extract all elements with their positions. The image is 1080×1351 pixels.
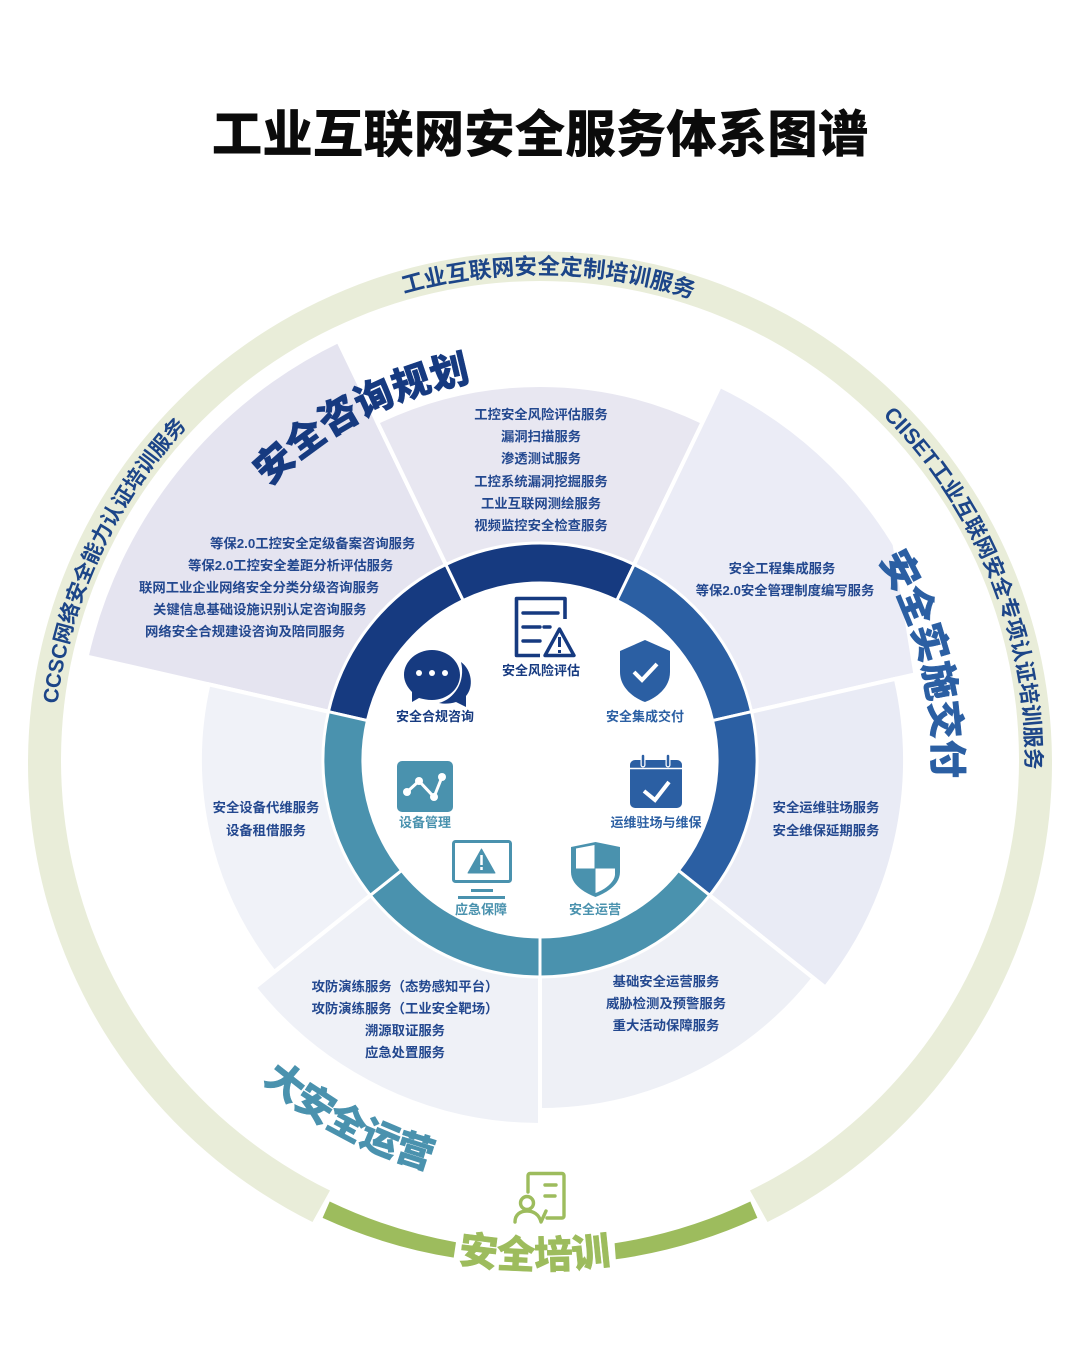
wedge: emergency — [255, 760, 540, 1125]
service list: risk assessment: 工控安全风险评估服务 — [474, 406, 608, 422]
ring band: pale green — [28, 251, 1052, 1222]
ring segment: compliance — [328, 564, 463, 721]
ring label: CCSC: CCSC网络安全能力认证培训服务 — [44, 418, 185, 702]
icon: trainer and document — [515, 1174, 564, 1222]
wedge: security operations — [540, 760, 814, 1110]
icon: shield with check — [620, 640, 670, 702]
service list: risk assessment: 工业互联网测绘服务 — [481, 495, 601, 511]
service list: on-site operations: 安全维保延期服务 — [773, 822, 879, 838]
wedge: equipment — [200, 684, 540, 972]
ring segment: equipment — [323, 712, 402, 895]
label: compliance consulting: 安全合规咨询 — [396, 709, 474, 724]
service list: integration delivery: 等保2.0安全管理制度编写服务 — [696, 582, 874, 598]
section heading: operations: 大安全运营 — [264, 1064, 437, 1172]
service list: security operations: 重大活动保障服务 — [613, 1017, 719, 1033]
label: equipment management: 设备管理 — [399, 815, 451, 830]
wedge: risk assessment — [377, 385, 703, 760]
service list: risk assessment: 视频监控安全检查服务 — [474, 517, 608, 533]
label: risk assessment: 安全风险评估 — [502, 663, 580, 678]
icon: monitor with warning — [454, 842, 510, 898]
service list: equipment: 设备租借服务 — [226, 822, 306, 838]
arc left — [323, 1202, 456, 1258]
service list: emergency — [312, 978, 498, 1060]
service list: on-site operations — [773, 799, 879, 838]
service list: equipment: 安全设备代维服务 — [213, 799, 319, 815]
heading: safety training: 安全培训 — [460, 1232, 610, 1272]
center disc — [363, 583, 717, 937]
service list: security operations: 基础安全运营服务 — [613, 973, 719, 989]
segmented ring — [323, 543, 757, 977]
service list: security operations: 威胁检测及预警服务 — [606, 995, 726, 1011]
service list: compliance consulting: 网络安全合规建设咨询及陪同服务 — [145, 623, 345, 639]
service list: integration delivery: 安全工程集成服务 — [729, 560, 835, 576]
service list: integration delivery — [696, 560, 874, 598]
icon: equipment chart — [397, 761, 453, 812]
safety training arc — [322, 1172, 758, 1272]
icon: chat bubbles — [404, 650, 471, 707]
service list: on-site operations: 安全运维驻场服务 — [773, 799, 879, 815]
ring label: CIISET: CIISET工业互联网安全专项认证培训服务 — [886, 408, 1044, 769]
ring segment: integration — [617, 564, 752, 721]
service list: equipment — [213, 799, 319, 838]
service list: risk assessment: 工控系统漏洞挖掘服务 — [474, 473, 608, 489]
service list: risk assessment — [474, 406, 608, 533]
title: 工业互联网安全服务体系图谱 — [212, 106, 868, 163]
ring segment: on-site — [678, 712, 757, 895]
service list: compliance consulting — [139, 535, 415, 639]
service list: compliance consulting: 等保2.0工控安全定级备案咨询服务 — [210, 535, 415, 551]
service list: compliance consulting: 等保2.0工控安全差距分析评估服务 — [188, 557, 393, 573]
service list: emergency: 攻防演练服务（工业安全靶场） — [312, 1000, 498, 1016]
service list: compliance consulting: 关键信息基础设施识别认定咨询服务 — [153, 601, 367, 617]
label: integration delivery: 安全集成交付 — [606, 709, 684, 724]
ring segment: emergency — [370, 870, 540, 977]
service list: emergency: 攻防演练服务（态势感知平台） — [312, 978, 498, 994]
ring segment: risk — [446, 543, 634, 600]
label: emergency assurance: 应急保障 — [455, 902, 507, 917]
service list: risk assessment: 漏洞扫描服务 — [501, 428, 581, 444]
label: on-site maintenance: 运维驻场与维保 — [610, 815, 702, 830]
label: security operations: 安全运营 — [569, 902, 621, 917]
service list: risk assessment: 渗透测试服务 — [501, 450, 581, 466]
section heading: consulting: 安全咨询规划 — [251, 349, 469, 486]
service list: security operations — [606, 973, 726, 1033]
service list: compliance consulting: 联网工业企业网络安全分类分级咨询服务 — [139, 579, 379, 595]
icon: risk document with warning — [516, 598, 574, 656]
ring segment: operations — [540, 870, 710, 977]
ring label: custom training: 工业互联网安全定制培训服务 — [402, 254, 695, 298]
outer training ring — [28, 251, 1052, 1222]
wedge: compliance consulting — [87, 341, 540, 760]
wedge: operations on-site — [540, 679, 905, 988]
arc right — [615, 1202, 757, 1259]
icon: calendar with check — [630, 756, 682, 808]
service list: emergency: 应急处置服务 — [365, 1044, 445, 1060]
service list: emergency: 溯源取证服务 — [365, 1023, 445, 1038]
section heading: delivery: 安全实施交付 — [878, 548, 967, 778]
icon: quartered shield — [571, 842, 620, 897]
wedge: integration delivery — [540, 386, 915, 760]
panel: consulting wedges and service wedges — [87, 341, 915, 1125]
